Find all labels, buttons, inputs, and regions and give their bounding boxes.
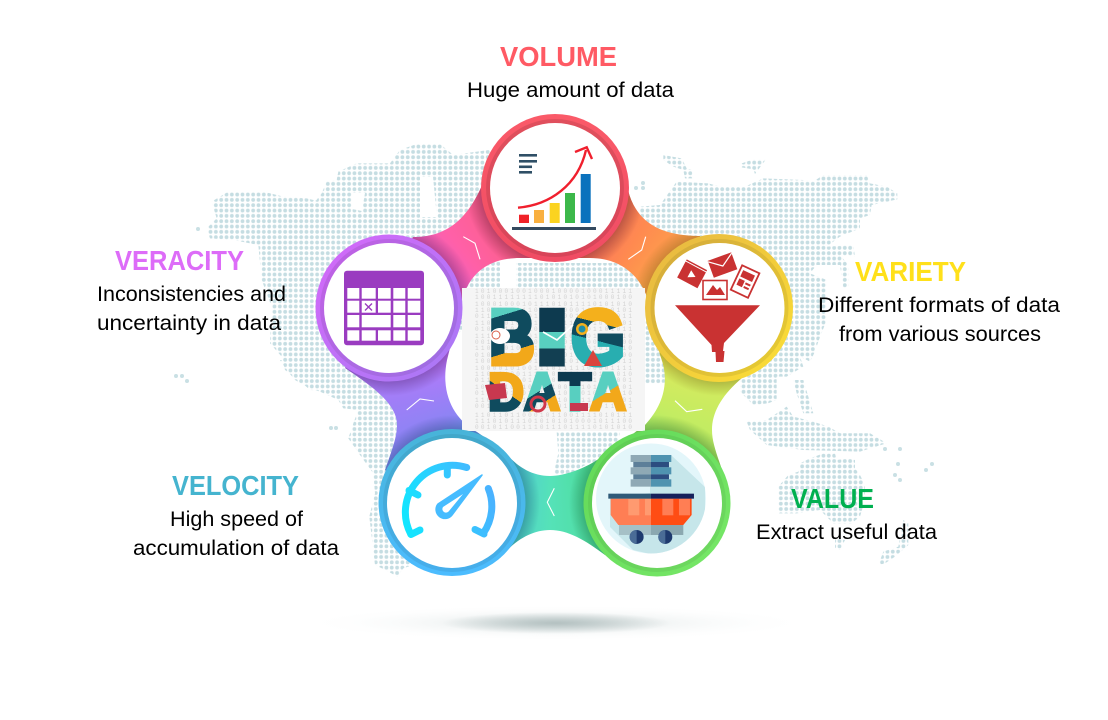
label: variety — [818, 256, 1060, 346]
icon: growth bar chart — [512, 147, 596, 230]
infographic foreground — [98, 46, 1060, 576]
label: value — [756, 483, 937, 544]
big data central image: 101001011010110010101100101 — [475, 384, 632, 391]
arrows: white chevrons — [407, 237, 702, 516]
label: velocity: accumulation of data — [133, 537, 339, 560]
node: volume — [481, 114, 629, 262]
label: variety: from various sources — [839, 323, 1041, 346]
gradient connector band — [345, 187, 742, 558]
label: velocity — [133, 470, 339, 560]
big data central image: 100101110010100101101001011 — [475, 358, 632, 365]
big data central image: 010011010100011101001101011 — [475, 326, 632, 333]
word: DATA: A — [524, 363, 560, 422]
label: veracity: Inconsistencies and — [97, 283, 286, 306]
label: value: VALUE — [791, 483, 874, 514]
word: DATA: T — [559, 363, 591, 422]
dotted world map — [174, 144, 934, 634]
label: value: Extract useful data — [756, 521, 937, 544]
big data central image: 100111111110101010101000100 — [475, 294, 632, 301]
label: veracity — [97, 245, 286, 335]
word: DATA — [488, 363, 626, 422]
big data central image: 010110100101001011010010110 — [475, 390, 632, 397]
label: volume: Huge amount of data — [467, 79, 674, 102]
big data central image: 111010111010101010001011100 — [475, 418, 632, 425]
big data central image: 010110010100111010010101100 — [475, 352, 632, 359]
node: veracity — [316, 234, 462, 382]
word: BIG: B — [489, 293, 535, 381]
big data central image: 011101010010011001000101011 — [475, 313, 632, 320]
node: value — [584, 430, 730, 576]
label: volume: VOLUME — [500, 41, 617, 72]
big data central image: 100010001011101011110101010 — [475, 301, 632, 308]
big data central image — [462, 288, 645, 431]
icon: speedometer — [405, 465, 492, 534]
big data central image: 001011001110111011110101010 — [475, 424, 632, 431]
label: variety: VARIETY — [855, 256, 966, 287]
label: veracity: VERACITY — [115, 245, 244, 276]
big data central image: 001101011001010011100110100 — [475, 339, 632, 346]
icon: data funnel — [675, 252, 760, 362]
word: BIG — [489, 293, 625, 381]
big data central image: 111010001011100100101001010 — [475, 333, 632, 340]
icon: calendar — [344, 271, 424, 345]
label: volume — [467, 41, 674, 102]
label: velocity: High speed of — [170, 508, 303, 531]
label: variety: Different formats of data — [818, 294, 1060, 317]
label: veracity: uncertainty in data — [97, 312, 281, 335]
word: DATA: D — [488, 363, 524, 422]
label: velocity: VELOCITY — [172, 470, 299, 501]
big data central image: 001101010010110101001011001 — [475, 403, 632, 410]
word: DATA: A — [590, 363, 626, 422]
word: BIG: I — [535, 293, 569, 381]
big data central image: 110101001110100101100101010 — [475, 371, 632, 378]
big data central image: 101000100100010000100011111 — [475, 288, 632, 295]
node: variety — [645, 234, 793, 382]
node: velocity — [378, 429, 526, 576]
big data central image: 011010010111001010011011001 — [475, 377, 632, 384]
word: BIG: G — [571, 293, 625, 381]
big data central image: 110000101100101000111010101 — [475, 307, 632, 314]
big data central image: 110010101101001010110100101 — [475, 397, 632, 404]
big data decorations — [485, 323, 602, 411]
big data central image: 110010100111010110101000101 — [475, 320, 632, 327]
big data central image: 110110110001011001111010111 — [475, 412, 632, 419]
icon: mining cart — [596, 444, 706, 557]
big data central image: 110100101110010101001011010 — [475, 345, 632, 352]
big data central image: 100001010011101111100001111 — [475, 365, 632, 372]
